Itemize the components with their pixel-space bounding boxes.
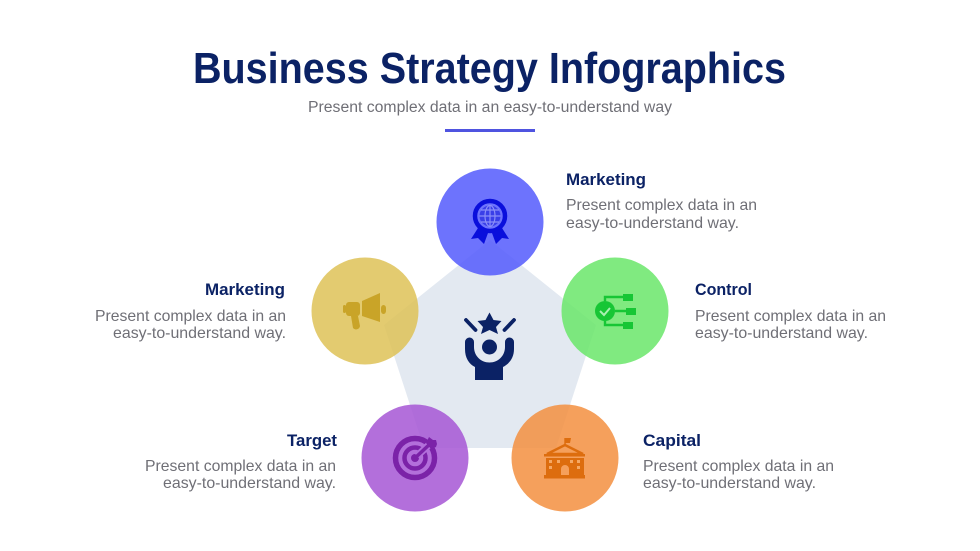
label: capital: easy-to-understand way. bbox=[643, 475, 816, 492]
label: target: easy-to-understand way. bbox=[163, 475, 336, 492]
label: marketing top: Marketing bbox=[566, 170, 646, 189]
label: capital bbox=[643, 431, 834, 492]
label: target: Target bbox=[287, 431, 337, 450]
label: target: Present complex data in an bbox=[145, 458, 336, 475]
circle: target bbox=[362, 404, 468, 512]
circle: control bbox=[562, 258, 668, 364]
label: marketing left: Present complex data in an bbox=[95, 308, 286, 325]
title: Business Strategy Infographics bbox=[193, 44, 786, 93]
label: control: Present complex data in an bbox=[695, 308, 886, 325]
label: marketing top: easy-to-understand way. bbox=[566, 215, 739, 232]
icon: globe award bbox=[471, 201, 509, 244]
icon: megaphone bbox=[343, 293, 386, 329]
label: capital: Capital bbox=[643, 431, 701, 450]
circle: marketing top bbox=[436, 168, 544, 276]
label: control: Control bbox=[695, 280, 752, 299]
label: marketing top bbox=[566, 170, 757, 232]
label: capital: Present complex data in an bbox=[643, 458, 834, 475]
title underline bbox=[445, 129, 535, 132]
label: marketing left: Marketing bbox=[205, 280, 285, 299]
icon: person with star bbox=[465, 312, 514, 380]
label: control bbox=[695, 280, 886, 342]
central pentagon bbox=[384, 240, 596, 448]
circle: capital bbox=[512, 404, 618, 512]
icon: capitol building bbox=[544, 438, 585, 478]
icon: target bbox=[396, 437, 437, 478]
icon: flow check bbox=[595, 294, 636, 329]
label: marketing left: easy-to-understand way. bbox=[113, 325, 286, 342]
label: control: easy-to-understand way. bbox=[695, 325, 868, 342]
label: marketing left bbox=[95, 280, 286, 342]
label: target bbox=[145, 431, 337, 492]
circle: marketing left bbox=[312, 258, 418, 364]
subtitle: Present complex data in an easy-to-understand way bbox=[308, 99, 672, 116]
label: marketing top: Present complex data in an bbox=[566, 197, 757, 214]
